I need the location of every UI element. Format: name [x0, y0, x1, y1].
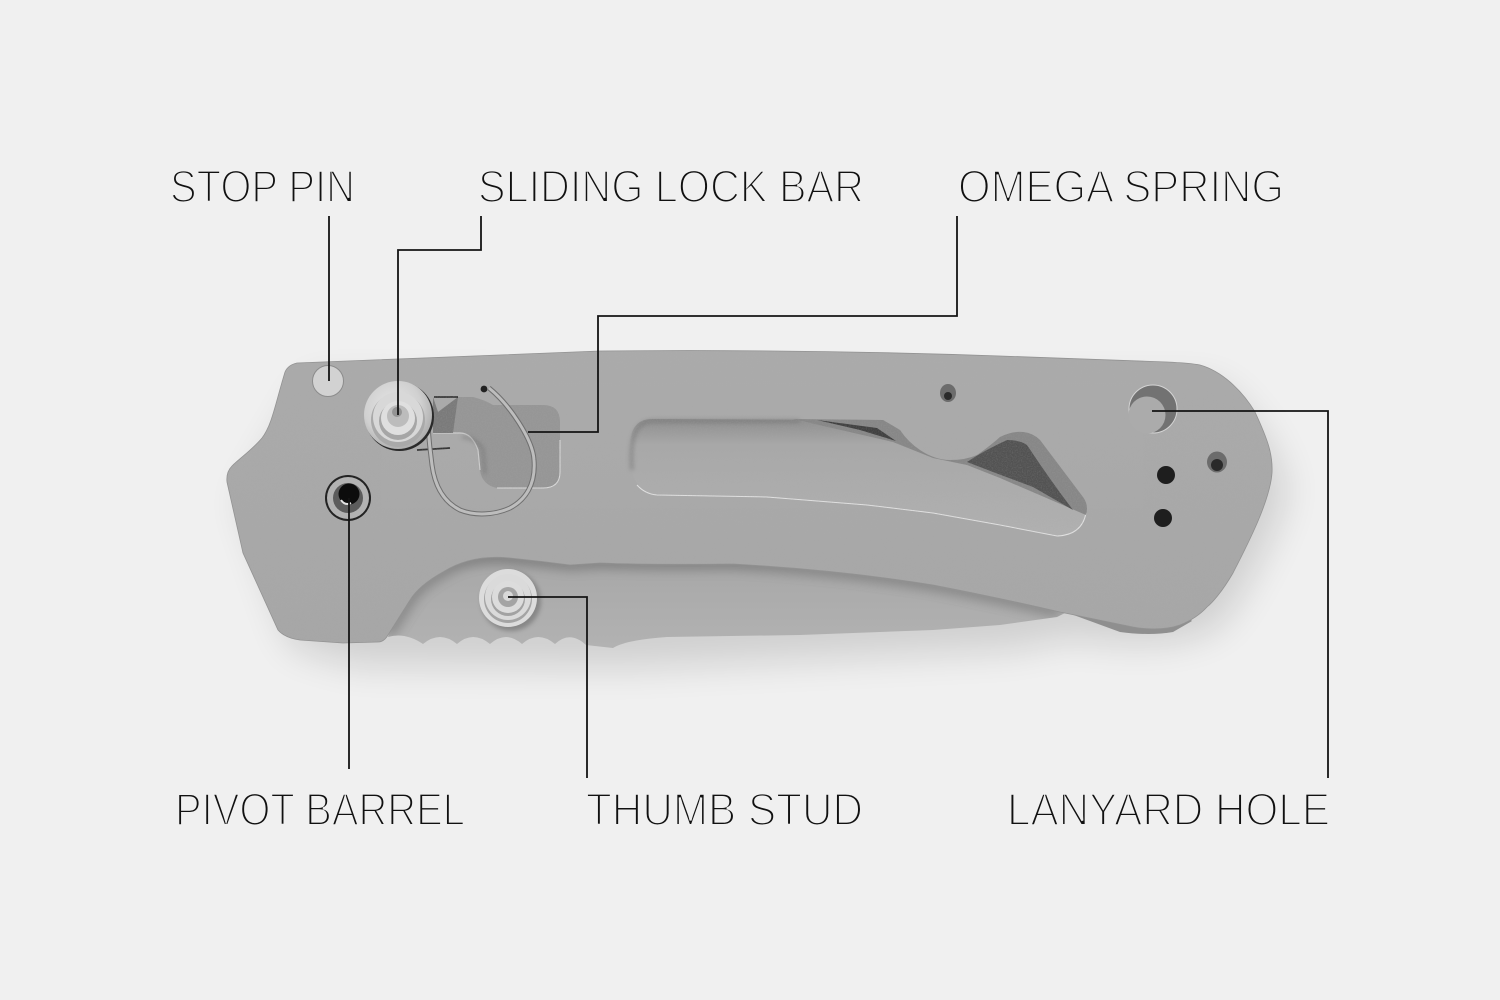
window lower highlight	[637, 485, 1086, 536]
blade shading under handle	[388, 557, 1060, 635]
handle liner	[1060, 610, 1192, 634]
knife shadow	[241, 381, 1286, 668]
leader: sliding lock bar	[398, 216, 481, 415]
lanyard hole	[1128, 385, 1177, 434]
pivot barrel	[325, 475, 371, 521]
label: pivot barrel: PIVOT BARREL	[175, 784, 465, 835]
label: omega spring: OMEGA SPRING	[958, 161, 1284, 212]
notch bevel	[793, 419, 1087, 515]
grain texture	[417, 396, 1078, 536]
leader: lanyard hole	[1152, 411, 1328, 778]
label: stop pin: STOP PIN	[170, 161, 355, 212]
knife illustration	[220, 345, 1286, 668]
label: sliding lock bar: SLIDING LOCK BAR	[478, 161, 864, 212]
blade	[388, 540, 1067, 648]
window top shadow	[631, 421, 800, 470]
top dark sliver	[817, 420, 896, 441]
labels	[170, 161, 1330, 835]
leader: stop pin	[328, 216, 330, 381]
leader: thumb stud	[508, 597, 587, 778]
leader: omega spring	[528, 216, 957, 432]
thumb stud	[479, 569, 541, 631]
label: lanyard hole: LANYARD HOLE	[1007, 784, 1330, 835]
lock window	[417, 397, 560, 488]
leader lines	[329, 216, 1328, 778]
screw holes	[940, 384, 1227, 527]
blade window	[630, 419, 1087, 536]
sliding lock bar button	[364, 381, 434, 451]
handle scale	[227, 351, 1272, 643]
stop pin	[312, 366, 344, 396]
leader: pivot barrel	[348, 498, 350, 769]
omega spring	[428, 386, 534, 514]
dark wedge	[967, 440, 1073, 510]
label: thumb stud: THUMB STUD	[586, 784, 863, 835]
